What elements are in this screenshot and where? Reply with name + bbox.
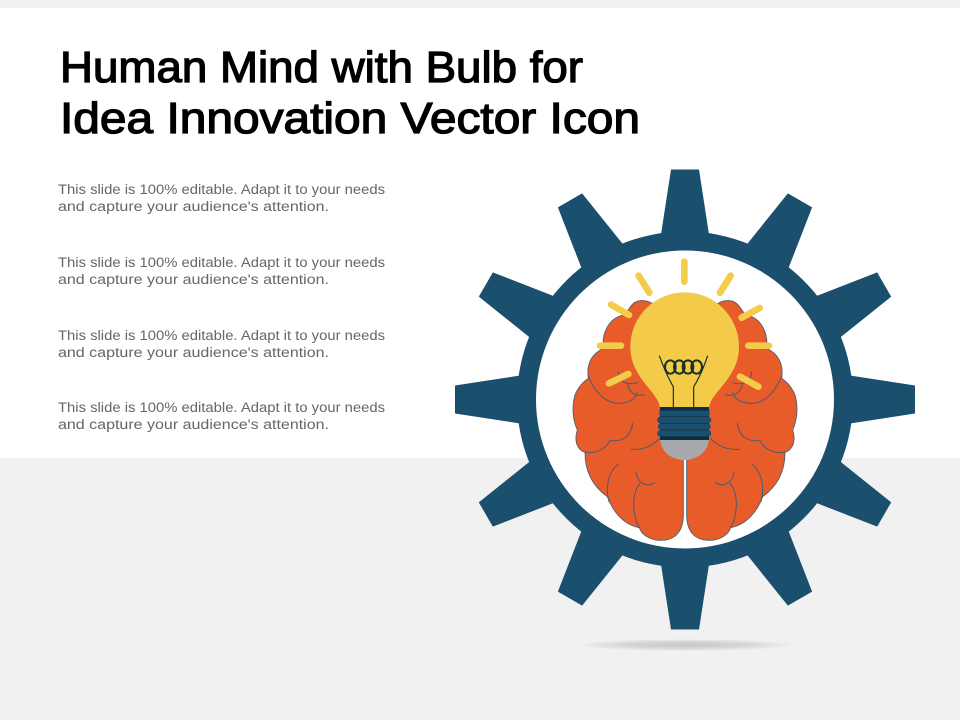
bulb glass bbox=[630, 292, 739, 408]
bulb dome bbox=[660, 439, 709, 460]
text block 4: This slide is 100% editable. Adapt it to your needs bbox=[58, 400, 385, 415]
text block 2: and capture your audience's attention. bbox=[58, 272, 329, 287]
title bbox=[60, 43, 640, 143]
bulb screw base bbox=[657, 407, 711, 440]
brain left half bbox=[573, 301, 683, 540]
icon: gear bbox=[455, 170, 915, 630]
text block 1: This slide is 100% editable. Adapt it to your needs bbox=[58, 182, 385, 197]
icon: brain with light bulb bbox=[573, 262, 797, 540]
bulb filament bbox=[659, 356, 708, 407]
text blocks bbox=[58, 182, 385, 432]
text block 2 bbox=[58, 255, 385, 287]
text block 3: and capture your audience's attention. bbox=[58, 345, 329, 360]
text block 1 bbox=[58, 182, 385, 214]
text block 2: This slide is 100% editable. Adapt it to your needs bbox=[58, 255, 385, 270]
text block 1: and capture your audience's attention. bbox=[58, 199, 329, 214]
brain right half bbox=[687, 301, 797, 540]
text block 4: and capture your audience's attention. bbox=[58, 417, 329, 432]
title: Idea Innovation Vector Icon bbox=[60, 94, 640, 143]
text block 4 bbox=[58, 400, 385, 432]
text block 3: This slide is 100% editable. Adapt it to your needs bbox=[58, 328, 385, 343]
gear shadow bbox=[575, 639, 795, 651]
bulb light rays bbox=[600, 262, 769, 387]
title: Human Mind with Bulb for bbox=[60, 43, 583, 92]
text block 3 bbox=[58, 328, 385, 360]
